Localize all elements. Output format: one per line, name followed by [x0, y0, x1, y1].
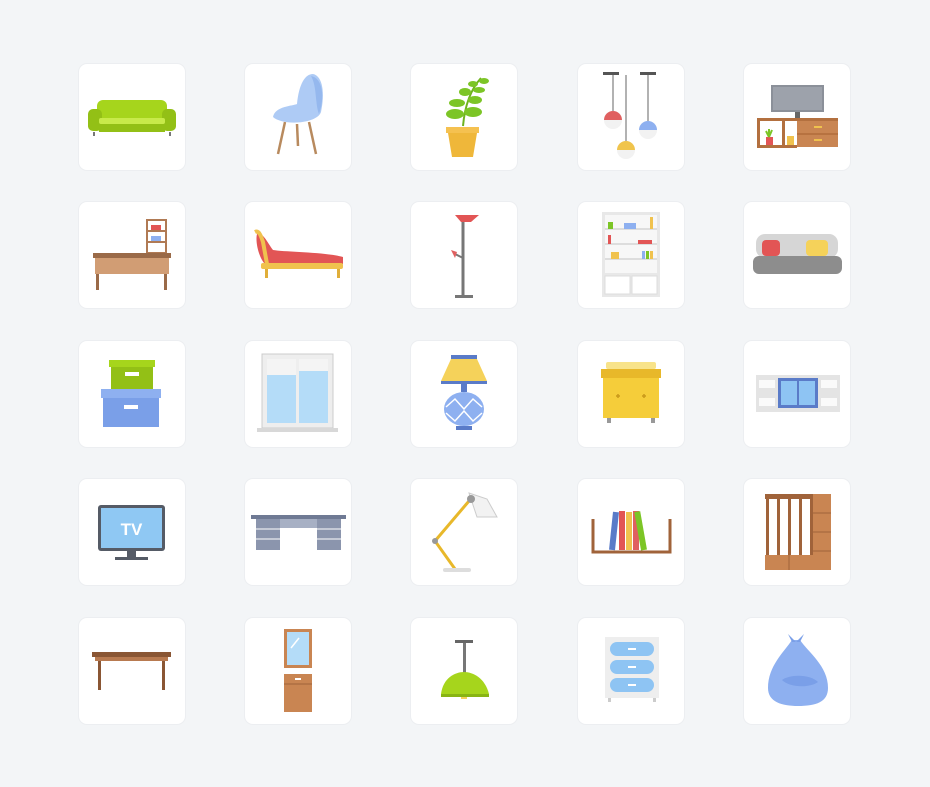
card: wardrobe	[744, 479, 850, 585]
icon: table	[92, 652, 171, 690]
icon: bean bag	[768, 634, 828, 706]
card: chair	[245, 64, 351, 170]
icon: pendant lamps	[603, 72, 657, 159]
icon: green sofa	[88, 100, 176, 136]
card: pendant lamps	[578, 64, 684, 170]
icon: desk lamp	[432, 493, 497, 572]
icon: mirror and cabinet	[284, 629, 312, 712]
icon: boxes	[101, 360, 161, 427]
card: tv wall unit	[744, 341, 850, 447]
icon: tv and cabinet	[757, 85, 838, 148]
icon: chest of drawers	[605, 637, 659, 702]
icon: books on shelf	[593, 511, 670, 552]
card: yellow bin	[578, 341, 684, 447]
card: bean bag	[744, 618, 850, 724]
card: desk with shelf	[79, 202, 185, 308]
icon: potted plant	[446, 78, 489, 157]
card: storage boxes	[79, 341, 185, 447]
icon: desk	[93, 220, 171, 290]
icon: gray sofa	[753, 234, 842, 274]
icon: chaise	[255, 232, 343, 278]
card: gray sofa	[744, 202, 850, 308]
icon: window	[257, 354, 338, 432]
card: book shelf	[578, 479, 684, 585]
card: tv	[79, 479, 185, 585]
card: office desk	[245, 479, 351, 585]
card: drawers	[578, 618, 684, 724]
icon: wardrobe	[765, 494, 831, 570]
card: chaise longue	[245, 202, 351, 308]
card: coffee table	[79, 618, 185, 724]
icon: office desk	[251, 515, 346, 550]
card: window	[245, 341, 351, 447]
icon: tv: TV	[121, 520, 143, 539]
card: bookshelf	[578, 202, 684, 308]
icon: bookshelf	[602, 212, 660, 297]
card: mirror cabinet	[245, 618, 351, 724]
icon: wall unit	[756, 375, 840, 412]
icon: table lamp	[441, 355, 487, 430]
icon: floor lamp	[451, 215, 479, 298]
card: tv unit	[744, 64, 850, 170]
card: ceiling lamp	[411, 618, 517, 724]
card: table lamp	[411, 341, 517, 447]
icon: blue chair	[273, 74, 323, 154]
card: desk lamp	[411, 479, 517, 585]
card: floor lamp	[411, 202, 517, 308]
card: plant	[411, 64, 517, 170]
card: sofa	[79, 64, 185, 170]
icon: ceiling lamp	[441, 640, 489, 699]
icon: bin	[601, 362, 661, 423]
